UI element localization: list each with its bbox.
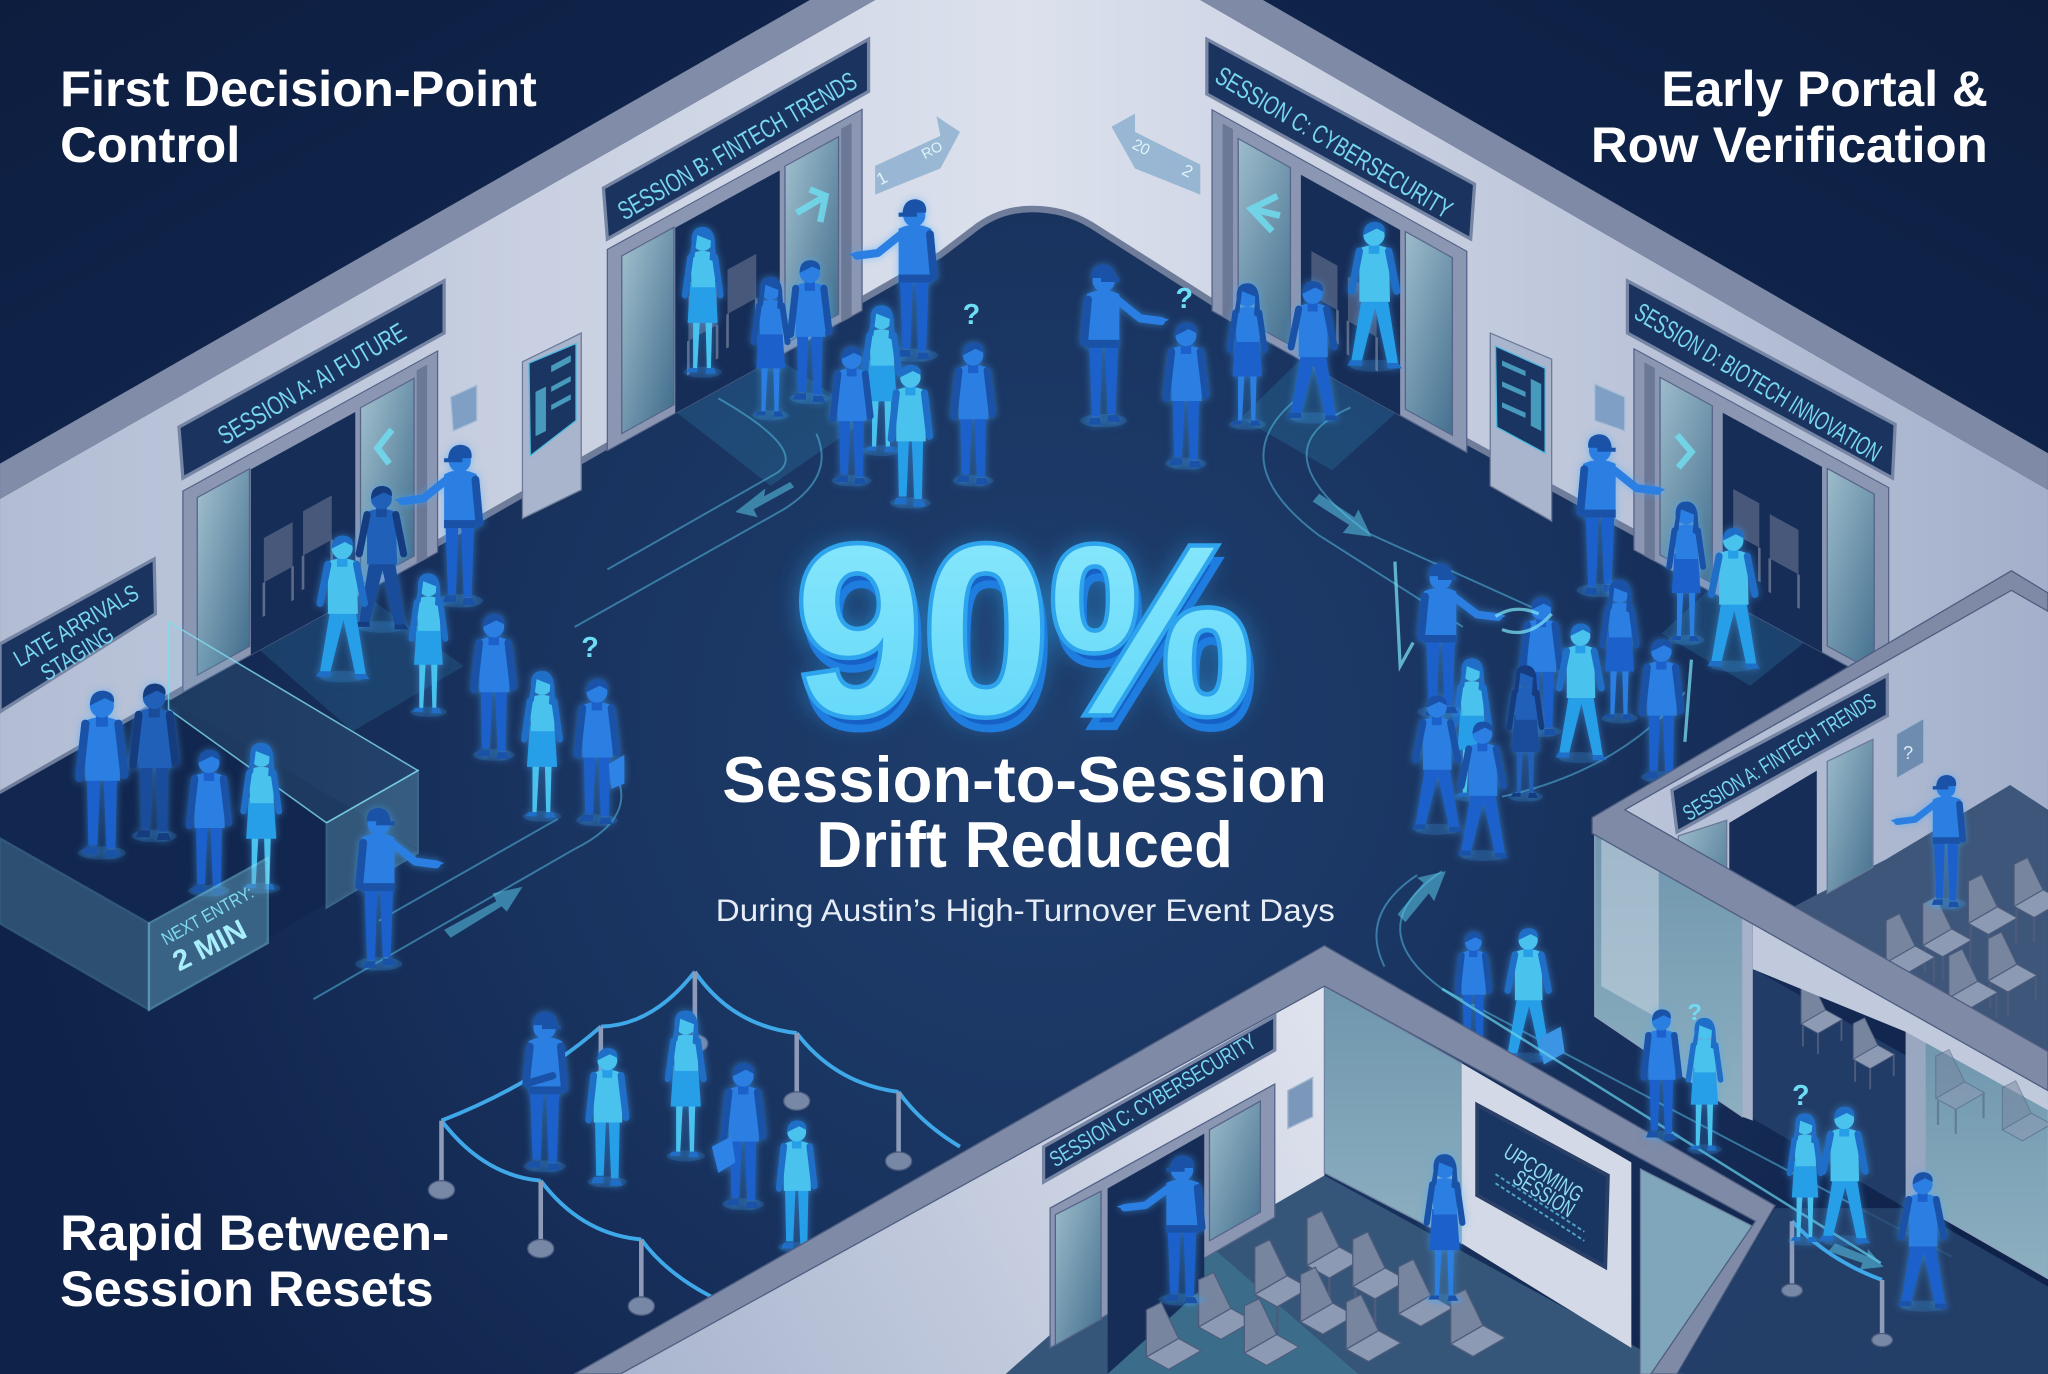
lower room glass corner	[1640, 1169, 1755, 1374]
corridor people	[1643, 1009, 1949, 1312]
headline: First Decision-Point Control: First Decision-Point	[60, 61, 537, 117]
chairs middle room	[1801, 983, 1895, 1089]
people crowd centre right	[1412, 563, 1682, 861]
upcoming session screen: UPCOMING	[1499, 1139, 1588, 1207]
headline: Early Portal & Row Verification	[1591, 61, 1988, 173]
door lower left glass	[1055, 1191, 1101, 1345]
pillar	[1742, 914, 1753, 1121]
sign: Late arrivals staging: STAGING	[36, 621, 118, 686]
headline: Early Portal & Row Verification: Row Verification	[1591, 117, 1988, 173]
floor light under door D	[1661, 575, 1821, 686]
staging glass enclosure front	[0, 839, 268, 1010]
people occluded by lower room	[1457, 928, 1565, 1064]
wall arrow sign left	[873, 116, 960, 195]
next entry time: 2 MIN	[168, 914, 252, 978]
next entry label: NEXT ENTRY:	[158, 881, 257, 949]
wall skirting	[0, 209, 1894, 794]
door lower	[1050, 1084, 1275, 1348]
staff at staging	[355, 808, 444, 971]
staging glass enclosure back	[169, 622, 418, 908]
lower room	[575, 946, 1775, 1374]
question mark B: ?	[963, 299, 980, 331]
floor guidance paths	[313, 392, 1951, 1256]
wall arrow sign right: 20	[1129, 136, 1153, 159]
question mark corridor 2: ?	[1792, 1080, 1810, 1112]
corridor stanchions	[1782, 1221, 1893, 1347]
kiosk left	[522, 333, 581, 519]
sign: Late arrivals staging	[0, 559, 155, 712]
staff at lower door	[1117, 1156, 1206, 1306]
wall icon sign left	[451, 385, 477, 431]
small wall sign lower	[1288, 1078, 1313, 1128]
sign: Session C	[1207, 39, 1475, 239]
session D queue	[1576, 434, 1760, 672]
floor light under door B	[675, 355, 869, 486]
headline: Rapid Between-Session Resets: Session Resets	[60, 1261, 434, 1317]
question mark A: ?	[581, 632, 599, 664]
headline: Rapid Between-Session Resets: Rapid Between-	[60, 1205, 449, 1261]
lower room floor	[1006, 1175, 1685, 1374]
stat caption	[722, 743, 1327, 881]
lower room cap	[575, 946, 1775, 1374]
stat subcaption: During Austin’s High-Turnover Event Days	[716, 893, 1335, 928]
right room door opening	[1729, 771, 1817, 940]
floor arrow right	[1313, 494, 1371, 537]
front glass left	[1595, 827, 1742, 1117]
back wall of the hall	[0, 0, 2048, 794]
door A	[183, 351, 438, 692]
conflict highlights	[1395, 562, 1691, 742]
room help sign	[1896, 718, 1924, 778]
stat caption: Drift Reduced	[816, 808, 1233, 881]
sign: Session B	[603, 39, 869, 239]
door D	[1634, 349, 1889, 689]
stat caption: Session-to-Session	[722, 743, 1327, 816]
right room floor	[1633, 784, 2048, 1084]
staging area people	[78, 684, 280, 897]
big 90% stat: 90%	[799, 508, 1256, 777]
floor light under door C	[1241, 355, 1399, 470]
floor arrow centre right	[1398, 871, 1446, 922]
sign: Session B: SESSION B: FINTECH TRENDS	[612, 66, 862, 226]
top right dark backdrop	[1241, 0, 2048, 457]
door B	[607, 109, 862, 451]
right room cap	[1592, 571, 2048, 1091]
wall arrow sign left: RO	[919, 139, 946, 163]
lower room glass panel	[1324, 986, 1462, 1243]
staff in right room	[1891, 775, 1966, 909]
headline: Early Portal & Row Verification: Early Portal &	[1661, 61, 1988, 117]
floor arrow left	[735, 482, 794, 517]
lower room left wall	[620, 986, 1324, 1374]
wall arrow sign right	[1112, 114, 1200, 195]
upcoming session screen	[1477, 1105, 1608, 1267]
big 90% stat: 90%	[795, 495, 1253, 764]
headline: First Decision-Point Control: Control	[60, 117, 240, 173]
sign: Session A fintech trends	[1672, 675, 1887, 832]
stanchion rope barrier	[428, 972, 960, 1315]
sign: Session D	[1627, 281, 1895, 478]
corridor arrow	[1829, 1243, 1883, 1270]
staff near screen	[1425, 1154, 1464, 1305]
kiosk right	[1490, 333, 1552, 521]
floor arrow staging	[444, 887, 522, 938]
question mark C: ?	[1176, 283, 1193, 315]
headline: Rapid Between-Session Resets	[60, 1205, 449, 1317]
question mark corridor 1: ?	[1687, 999, 1702, 1025]
sign: Session A fintech trends: SESSION A: FINTECH TRENDS	[1678, 688, 1881, 826]
session B queue	[684, 199, 994, 509]
lower room white wall	[1462, 1063, 1631, 1348]
sign: Session C: SESSION C: CYBERSECURITY	[1210, 60, 1458, 225]
chairs lower room	[1146, 1211, 1505, 1369]
session A queue	[316, 445, 624, 826]
reflective panels	[1601, 836, 1659, 1019]
door arrows	[377, 189, 1691, 468]
people in reset line	[523, 1011, 816, 1253]
chairs in right room	[1886, 858, 2048, 1033]
lower room lit floor	[1108, 1241, 1358, 1374]
top left dark backdrop	[0, 0, 836, 470]
upcoming session screen: SESSION	[1509, 1165, 1579, 1222]
sign: Late arrivals staging: LATE ARRIVALS	[9, 579, 143, 672]
sign: Session D: SESSION D: BIOTECH INNOVATION	[1630, 297, 1887, 468]
door lower opening	[1108, 1134, 1204, 1374]
floor light under door A	[248, 584, 464, 731]
right room	[1592, 571, 2048, 1279]
front glass right	[1925, 1033, 2048, 1279]
sign: Session A: SESSION A: AI FUTURE	[212, 317, 411, 451]
wall icon sign right	[1595, 384, 1625, 431]
wall arrow sign left: 1	[873, 168, 891, 189]
right room door glass	[1827, 739, 1873, 893]
corridor floor	[1677, 1208, 2048, 1374]
stanchion posts	[428, 972, 912, 1315]
sign: Session A	[179, 281, 444, 478]
room help sign: ?	[1903, 742, 1913, 763]
door C	[1212, 110, 1467, 452]
chairs behind glass	[1936, 1050, 2048, 1141]
session C queue	[1080, 222, 1402, 470]
headline: First Decision-Point Control	[60, 61, 537, 173]
sign: Session C lower: SESSION C: CYBERSECURITY	[1045, 1029, 1261, 1172]
wall cap right	[1200, 0, 2048, 490]
staging area floor	[0, 699, 418, 1010]
wall arrow sign right: 2	[1179, 160, 1196, 182]
big 90% stat: 90%	[795, 498, 1253, 767]
middle room below cap	[1751, 968, 1906, 1208]
door lower right glass	[1209, 1101, 1260, 1241]
right room back wall	[1625, 590, 2048, 895]
sign: Session C lower	[1044, 1016, 1275, 1182]
wall cap left	[0, 0, 875, 499]
corridor guide line	[1442, 989, 1881, 1263]
